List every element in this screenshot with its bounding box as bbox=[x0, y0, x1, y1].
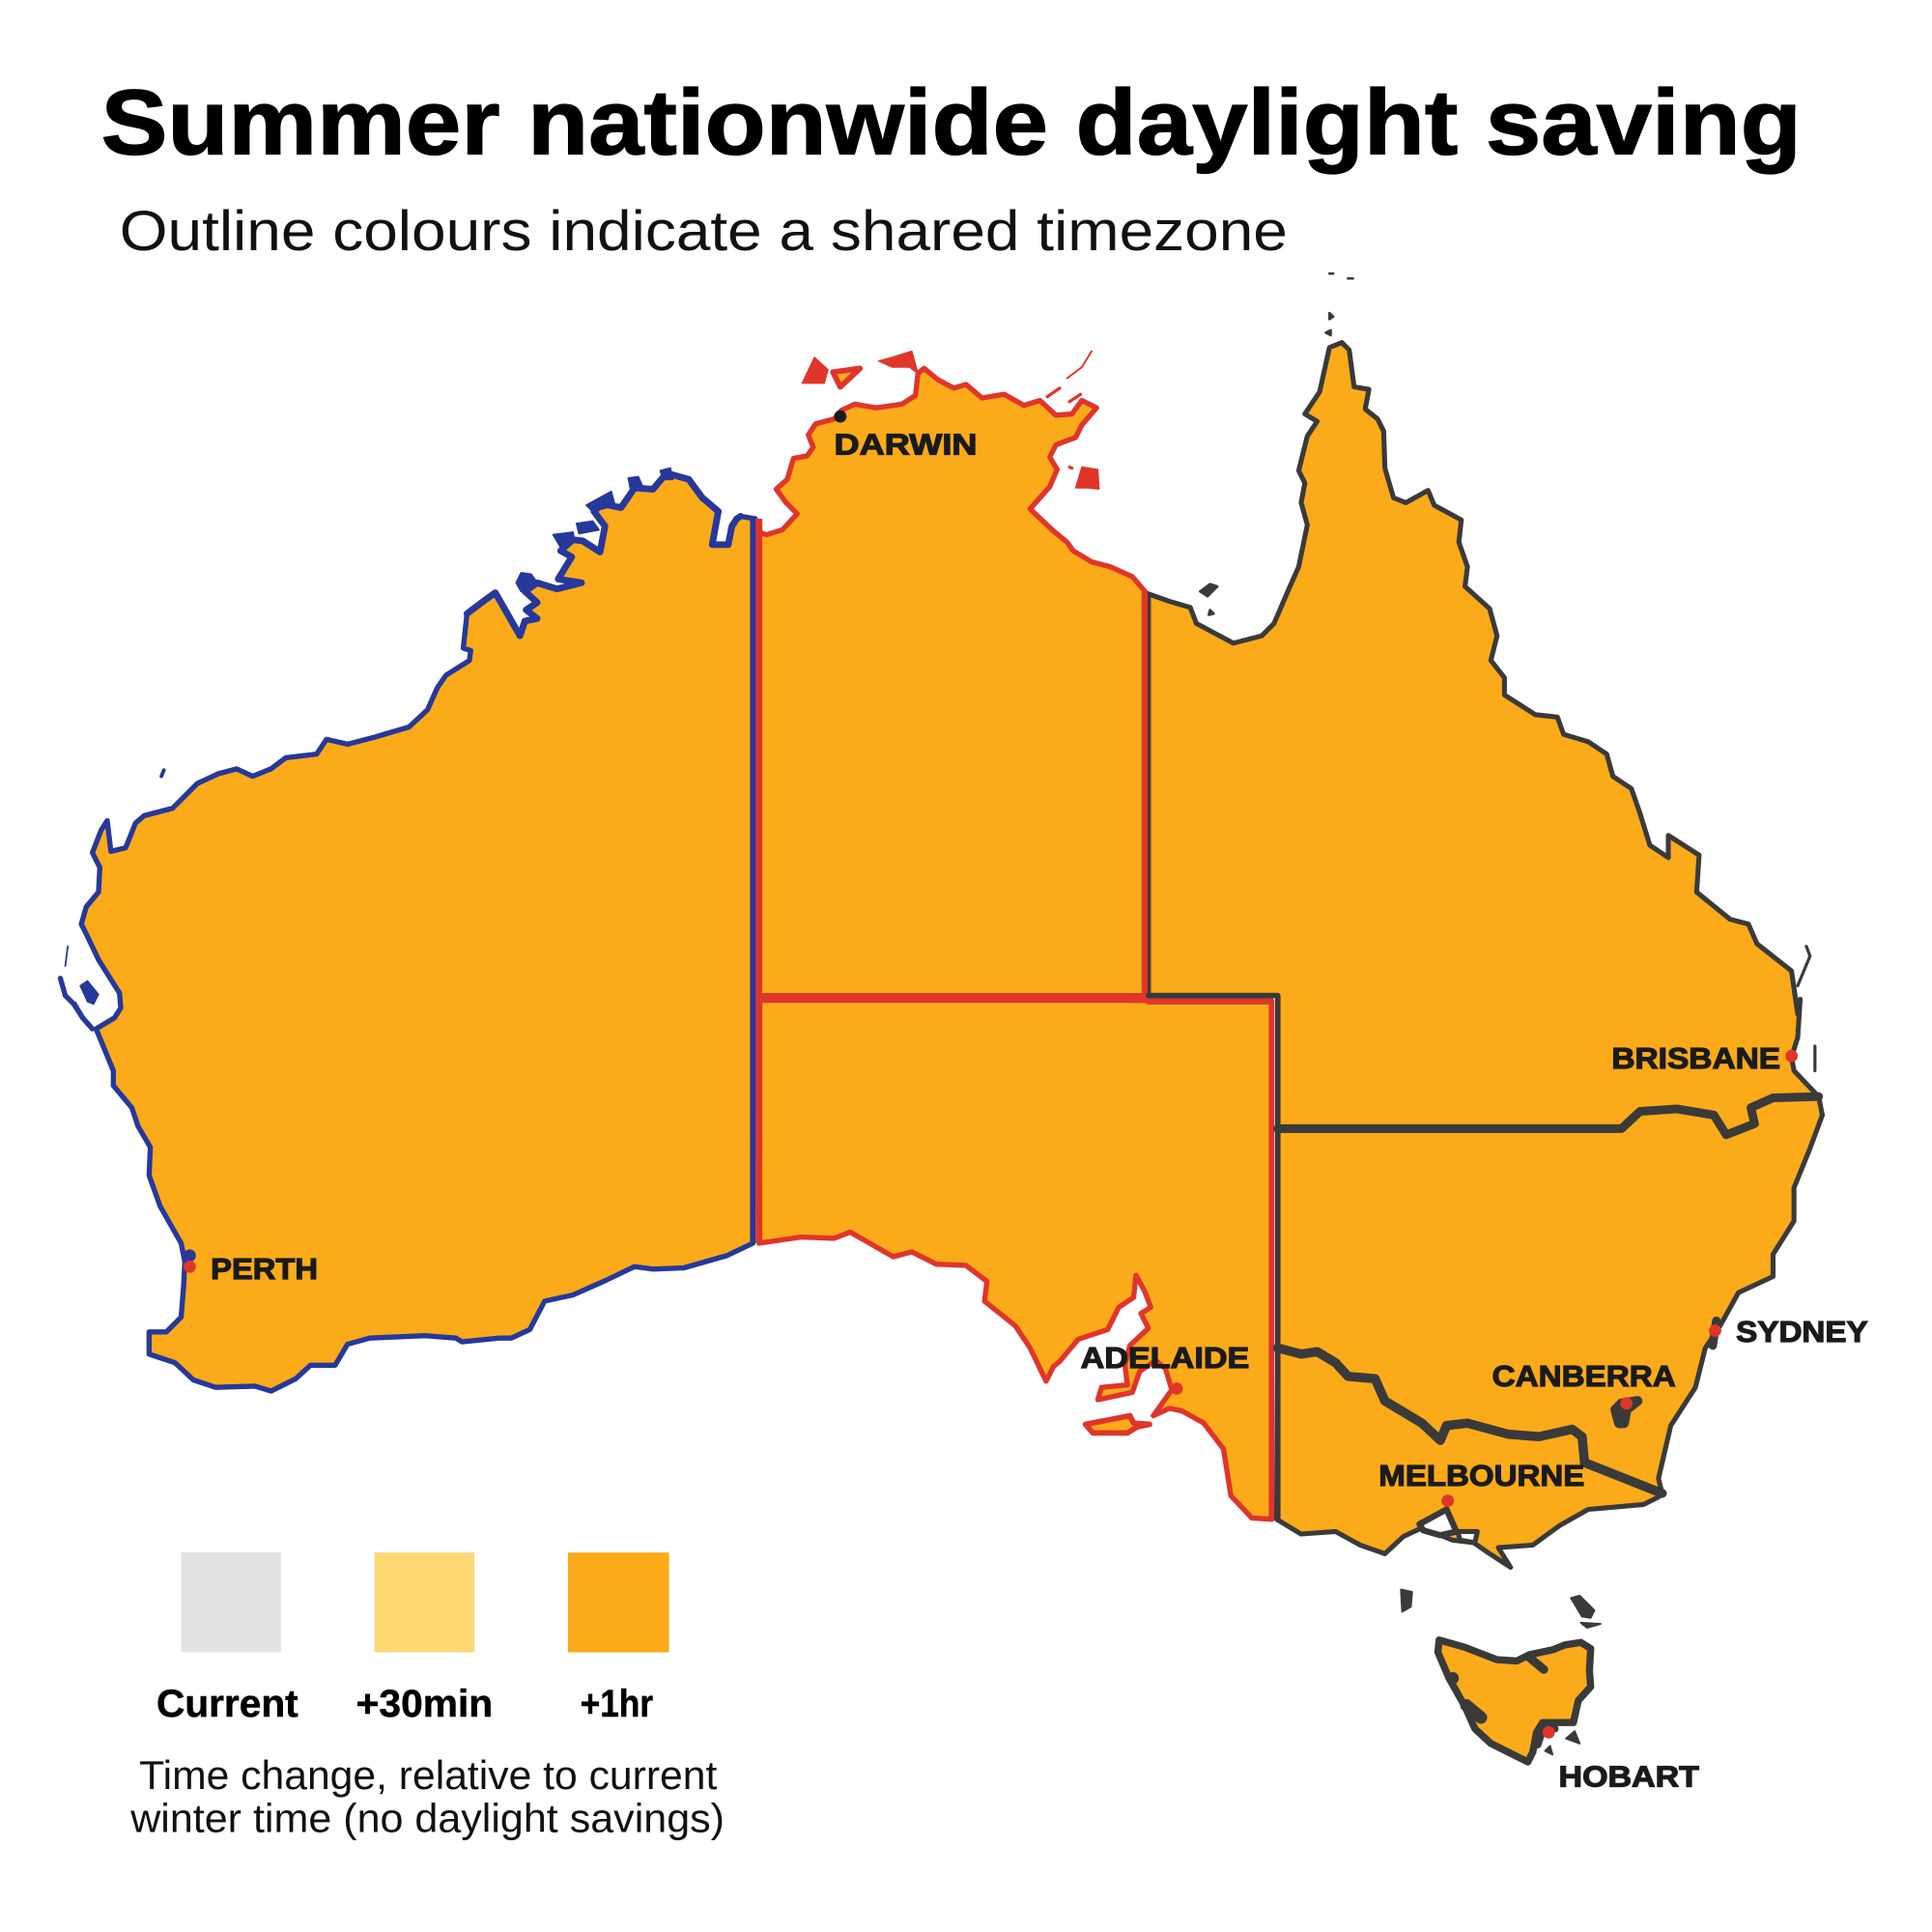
Wessel islets bbox=[1047, 388, 1081, 469]
state: Queensland bbox=[1149, 273, 1819, 1135]
NT/SA west border bbox=[756, 519, 761, 1243]
Bruny Island bbox=[1566, 1731, 1579, 1744]
NT east border bbox=[1142, 593, 1147, 1001]
legend caption bbox=[129, 1752, 724, 1841]
swatch: current bbox=[182, 1552, 281, 1652]
Melville Island bbox=[833, 368, 860, 387]
marker: Brisbane bbox=[1785, 1050, 1798, 1062]
NT/QLD border bbox=[1147, 594, 1151, 996]
Shark Bay sliver bbox=[75, 1003, 86, 1021]
marker: Perth (blue) bbox=[184, 1249, 196, 1262]
Cape Barren Island bbox=[1580, 1623, 1601, 1628]
marker: Melbourne bbox=[1441, 1494, 1454, 1507]
SA north-east border bbox=[1149, 1002, 1271, 1520]
QLD/SA border bbox=[1149, 996, 1278, 1520]
legend label: +1hr: +1hr bbox=[581, 1683, 653, 1725]
label: Hobart: HOBART bbox=[1559, 1760, 1699, 1793]
Dirk Hartog coast bbox=[60, 979, 93, 1029]
NSW/VIC border bbox=[1278, 1348, 1662, 1493]
Kimberley islets bbox=[516, 469, 672, 591]
state: South Australia bbox=[759, 999, 1271, 1520]
Bernier strip bbox=[66, 947, 68, 966]
Flinders Island bbox=[1571, 1596, 1595, 1618]
timezone borders bbox=[753, 519, 1819, 1520]
state: New South Wales bbox=[1278, 1096, 1822, 1493]
city markers bbox=[184, 411, 1798, 1739]
swatch: +1hr bbox=[568, 1552, 669, 1652]
Port Phillip Bay bbox=[1419, 1509, 1457, 1535]
legend label: Current: Current bbox=[156, 1683, 298, 1725]
marker: Darwin bbox=[835, 411, 846, 423]
NT south border bbox=[759, 994, 1149, 1002]
map of Australia bbox=[60, 273, 1822, 1762]
QLD/NSW border bbox=[1278, 1096, 1819, 1135]
swatch: +30min bbox=[375, 1552, 474, 1652]
label: Perth: PERTH bbox=[211, 1253, 318, 1286]
Western Port bbox=[1458, 1531, 1477, 1543]
label: Darwin: DARWIN bbox=[835, 429, 977, 462]
Tasman islet bbox=[1545, 1746, 1552, 1754]
label: Melbourne: MELBOURNE bbox=[1378, 1460, 1584, 1492]
Bathurst Island bbox=[802, 357, 828, 384]
Sydney harbour thickening bbox=[1713, 1321, 1717, 1346]
title: Summer nationwide daylight saving bbox=[101, 71, 1802, 174]
state: Tasmania bbox=[1401, 1589, 1601, 1762]
marker: Adelaide bbox=[1171, 1382, 1182, 1395]
label: Canberra: CANBERRA bbox=[1492, 1360, 1676, 1393]
state: Victoria bbox=[1276, 1348, 1662, 1567]
legend caption: Time change, relative to current bbox=[139, 1752, 718, 1798]
label: Sydney: SYDNEY bbox=[1736, 1316, 1868, 1349]
legend caption: winter time (no daylight savings) bbox=[129, 1796, 724, 1841]
Arnhem north-east fringe bbox=[1067, 352, 1092, 379]
marker: Hobart bbox=[1543, 1726, 1555, 1739]
Tamar inlet bbox=[1529, 1658, 1544, 1669]
state: Northern Territory bbox=[759, 352, 1146, 998]
marker: Canberra bbox=[1620, 1397, 1633, 1409]
Fraser and Moreton islands bbox=[1798, 947, 1815, 1070]
city labels bbox=[211, 429, 1868, 1793]
label: Adelaide: ADELAIDE bbox=[1081, 1342, 1249, 1375]
Macquarie Harbour bbox=[1466, 1705, 1481, 1718]
west coast bulge bbox=[1448, 1673, 1458, 1683]
marker: Perth (red) bbox=[184, 1261, 196, 1273]
north-west islet bbox=[161, 770, 164, 777]
state: Western Australia bbox=[60, 469, 755, 1391]
legend label: +30min: +30min bbox=[356, 1683, 493, 1725]
subtitle: Outline colours indicate a shared timezone bbox=[120, 200, 1288, 263]
marker: Sydney bbox=[1709, 1324, 1721, 1337]
Groote Eylandt bbox=[1076, 467, 1099, 489]
Peron Peninsula bbox=[80, 980, 99, 1005]
WA border bbox=[751, 519, 755, 1243]
Hobart estuary bbox=[1538, 1729, 1555, 1745]
label: Brisbane: BRISBANE bbox=[1611, 1042, 1780, 1075]
ACT outline bbox=[1615, 1401, 1637, 1423]
Kangaroo Island bbox=[1086, 1416, 1150, 1433]
Kimberley coast heavy outline bbox=[467, 473, 741, 636]
Cobourg Peninsula bbox=[878, 352, 918, 373]
King Island bbox=[1401, 1589, 1412, 1611]
legend bbox=[129, 1552, 724, 1841]
Torres Strait and Wellesley islets bbox=[1200, 273, 1353, 614]
